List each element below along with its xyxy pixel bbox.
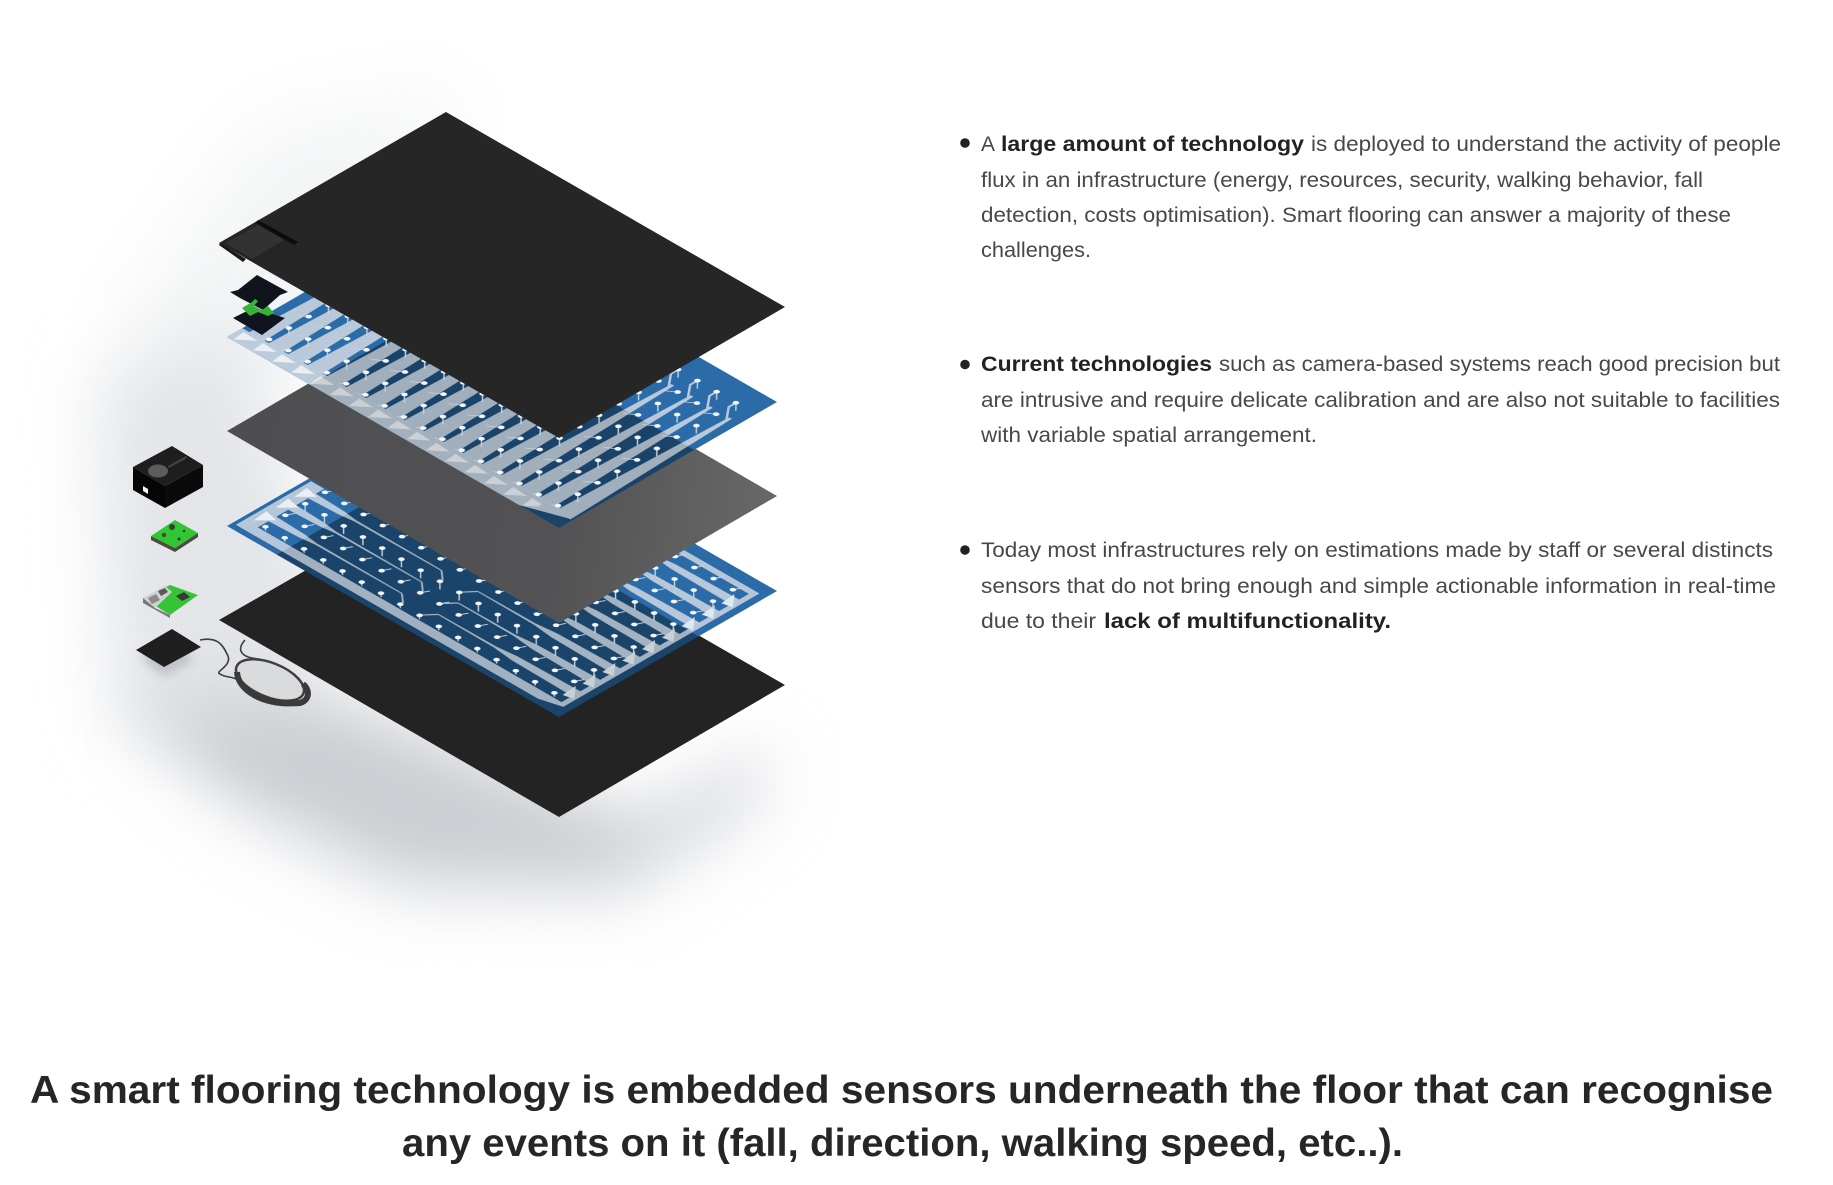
text block: bullet 1: flux in an infrastructure (energy, resources, security, walking behavior, fall	[981, 169, 1703, 192]
icon: sensor hardware modules	[133, 446, 310, 709]
ambient floor shadow	[95, 90, 770, 890]
heading: bottom statement: A smart flooring technology is embedded sensors underneath the floor that can recognise	[30, 1069, 1773, 1112]
icon: small connector chips	[230, 275, 288, 335]
icon: coiled cable ring	[230, 651, 310, 709]
frame and strips	[232, 406, 766, 714]
icon: green sensor board	[151, 520, 198, 552]
text block: bullet 3: due to their	[981, 610, 1096, 633]
text block: bullet 1	[960, 133, 1781, 262]
text block: bullet 2: are intrusive and require delicate calibration and are also not suitable to facilities	[981, 389, 1780, 412]
text block: bullet 2	[960, 353, 1780, 447]
icon: top sheet corner pad	[219, 220, 298, 266]
text block: bullet 2: Current technologies	[981, 353, 1212, 376]
contact dots	[257, 230, 745, 511]
icon: black sensor pad with cable	[136, 629, 284, 680]
text block: bullet 2: with variable spatial arrangement.	[980, 424, 1317, 447]
icon: single-board computer	[143, 585, 198, 618]
layer: upper sensor grid	[227, 211, 777, 528]
text block: bullet 3: sensors that do not bring enough and simple actionable information in real-time	[981, 575, 1776, 598]
icon: black gateway box	[133, 446, 203, 508]
text block: bullet 1: challenges.	[981, 239, 1091, 262]
contact dots	[256, 415, 751, 701]
text block: bullet 3: Today most infrastructures rely on estimations made by staff or several distincts	[981, 539, 1773, 562]
text block: bullet 2: such as camera-based systems reach good precision but	[1219, 353, 1780, 376]
illustration: exploded smart floor layers	[133, 112, 785, 817]
text block: bullet 1: large amount of technology	[1001, 133, 1304, 156]
layer: top black sheet	[219, 112, 785, 438]
layer: lower sensor grid	[227, 400, 777, 717]
heading: bottom statement	[30, 1069, 1773, 1165]
strips and margin	[227, 224, 754, 527]
text block: bullet 3: lack of multifunctionality.	[1104, 610, 1391, 633]
text block: bullet 1: is deployed to understand the activity of people	[1311, 133, 1781, 156]
layer: gray pressure sheet	[227, 304, 777, 623]
text block: bullet 1: A	[981, 133, 995, 156]
heading: bottom statement: any events on it (fall, direction, walking speed, etc..).	[402, 1122, 1403, 1165]
text block: bullet 1: detection, costs optimisation). Smart flooring can answer a majority of these	[981, 204, 1731, 227]
layer: bottom black sheet	[219, 490, 785, 817]
text block: bullet 3	[960, 539, 1776, 633]
